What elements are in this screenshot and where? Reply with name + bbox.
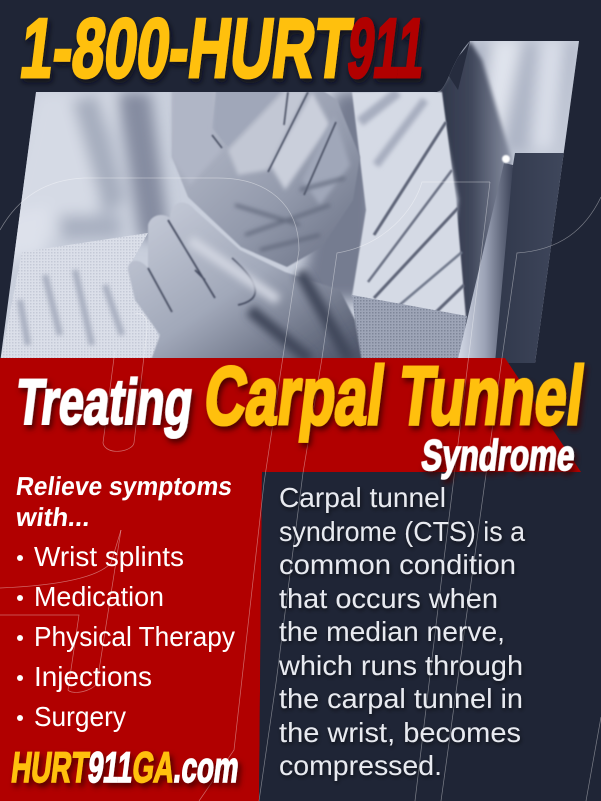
description paragraph: Carpal tunnel	[279, 482, 446, 513]
treatment list: Wrist splints	[34, 541, 184, 572]
lower hand gripping wrist	[128, 202, 362, 363]
treatment list	[17, 541, 235, 732]
logo: phone number: 911	[343, 1, 430, 95]
description paragraph: compressed.	[279, 750, 442, 781]
description paragraph: common condition	[279, 549, 516, 580]
upper hand	[172, 90, 360, 267]
logo: phone number: 1-800-HURT	[16, 1, 356, 95]
left sleeve	[0, 233, 160, 363]
treatment list: Medication	[34, 581, 164, 612]
description paragraph	[278, 482, 525, 781]
jacket shade beside tie	[437, 41, 512, 363]
description paragraph: the wrist, becomes	[279, 717, 521, 748]
description paragraph: that occurs when	[279, 583, 498, 614]
heading: relieve symptoms	[13, 471, 234, 532]
heading: relieve symptoms: Relieve symptoms	[14, 471, 234, 501]
website: HURT911GA.com	[9, 744, 242, 792]
fingers	[228, 90, 308, 175]
description paragraph: the carpal tunnel in	[279, 683, 523, 714]
laptop	[457, 153, 565, 363]
description paragraph: which runs through	[278, 650, 523, 681]
title: Treating	[12, 366, 197, 438]
title	[12, 349, 589, 480]
shirt folds	[0, 41, 579, 300]
thumb	[172, 92, 216, 180]
treatment list: Injections	[34, 661, 152, 692]
treatment list: Surgery	[34, 701, 126, 732]
jacket sleeve right	[352, 295, 467, 363]
heading: relieve symptoms: with...	[13, 502, 92, 532]
description paragraph: the median nerve,	[279, 616, 505, 647]
photo: hands holding a wrist	[0, 40, 601, 365]
red banner and left panel	[0, 358, 581, 801]
treatment list: Physical Therapy	[34, 621, 235, 652]
striped tie	[352, 92, 466, 318]
gap between thumb and index finger	[214, 92, 274, 140]
dark text panel	[259, 472, 601, 801]
description paragraph: syndrome (CTS) is a	[279, 516, 525, 547]
decorative outlines	[0, 178, 601, 801]
